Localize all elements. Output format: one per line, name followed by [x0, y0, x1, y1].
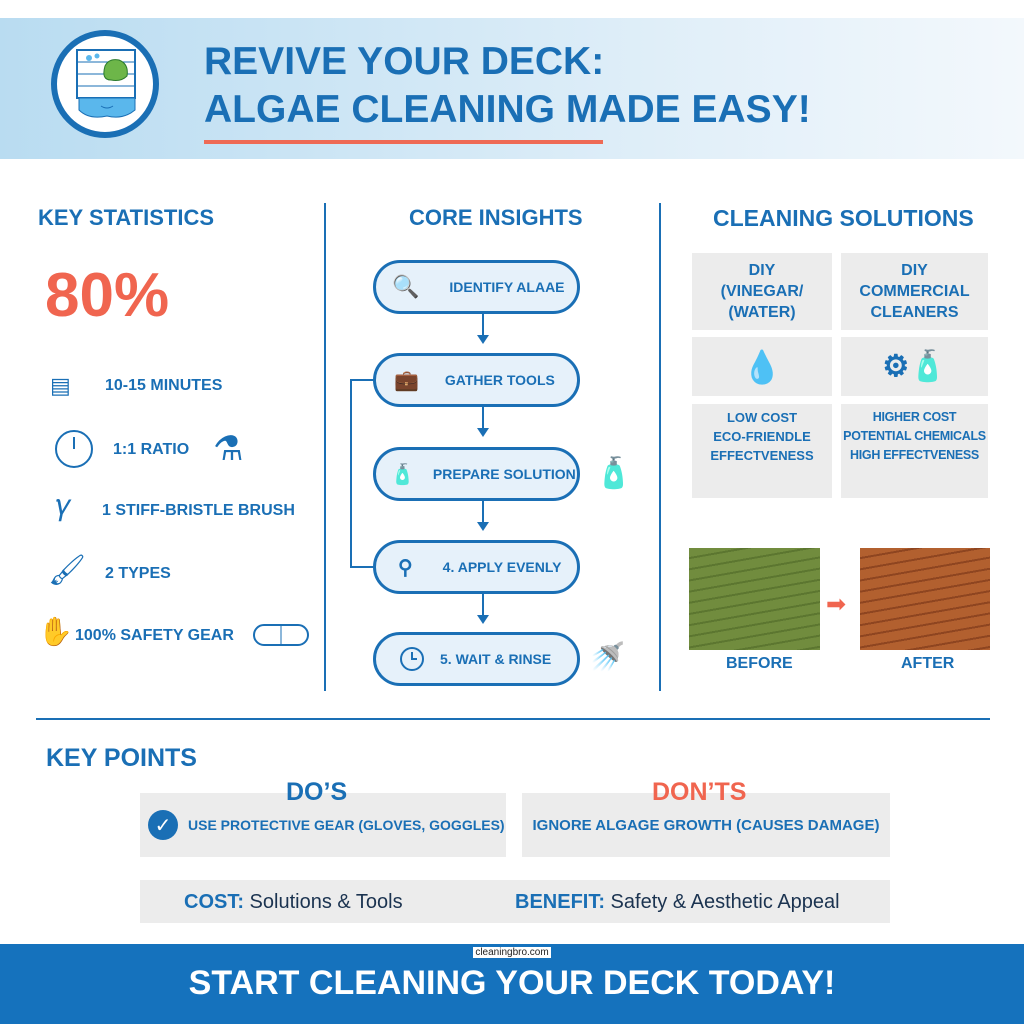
flow step 4: ⚲	[398, 556, 413, 578]
flow step 3: 🧴	[390, 464, 415, 486]
stat rows: 1 STIFF-BRISTLE BRUSH	[102, 502, 295, 519]
stat rows: ⚗	[213, 430, 243, 468]
text: HIGH EFFECTVENESS	[850, 448, 979, 462]
panel: key statistics	[38, 205, 309, 647]
do's: ✓	[155, 814, 171, 836]
flow step 5: 5. WAIT & RINSE	[440, 651, 551, 667]
solution grid: DIY	[749, 262, 775, 279]
flow step 3: PREPARE SOLUTION	[433, 466, 576, 482]
cost/benefit bar	[140, 880, 890, 923]
title: REVIVE YOUR DECK:	[204, 40, 604, 83]
stat rows: ✋	[38, 616, 73, 647]
text: COMMERCIAL	[859, 283, 970, 300]
don'ts: DON’TS	[652, 778, 746, 806]
solution grid: (WATER)	[728, 304, 796, 321]
text: 🚿	[590, 641, 625, 672]
text: AFTER	[901, 655, 954, 672]
title: ALGAE CLEANING MADE EASY!	[204, 88, 811, 131]
text: EFFECTVENESS	[710, 448, 814, 463]
text: DIY	[901, 262, 928, 279]
text: 🧴	[595, 457, 632, 490]
do's	[140, 778, 506, 857]
text: BEFORE	[726, 655, 793, 672]
flow step 1: 🔍	[392, 274, 419, 299]
before photo	[689, 548, 820, 650]
do's: USE PROTECTIVE GEAR (GLOVES, GOGGLES)	[188, 817, 505, 833]
heading: CLEANING SOLUTIONS	[713, 205, 974, 231]
text: CLEANERS	[870, 304, 958, 321]
cost/benefit bar: COST: Solutions & Tools	[184, 891, 403, 913]
solution grid	[692, 253, 832, 330]
stat rows	[38, 373, 309, 647]
flow step 2: 💼	[394, 370, 419, 392]
big stat: 80%	[45, 261, 169, 330]
don'ts	[522, 778, 890, 857]
cost/benefit bar: BENEFIT: Safety & Aesthetic Appeal	[515, 891, 840, 913]
flow step 1: IDENTIFY ALAAE	[449, 279, 565, 295]
text: HIGHER COST	[873, 410, 956, 424]
footer: cleaningbro.com	[475, 947, 549, 958]
flow step 1	[373, 260, 580, 314]
flow step 2	[373, 353, 580, 407]
do's: DO’S	[286, 778, 347, 806]
title	[204, 40, 811, 131]
dividers	[324, 203, 326, 691]
text: POTENTIAL CHEMICALS	[843, 429, 986, 443]
text: ECO-FRIENDLE	[713, 429, 811, 444]
solution grid: (VINEGAR/	[721, 283, 803, 300]
text: ⚙🧴	[882, 350, 947, 383]
flow step 4: 4. APPLY EVENLY	[443, 559, 561, 575]
heading: CORE INSIGHTS	[409, 205, 583, 230]
heading: KEY STATISTICS	[38, 205, 214, 230]
don'ts: IGNORE ALGAGE GROWTH (CAUSES DAMAGE)	[533, 816, 879, 834]
stat rows: 1:1 RATIO	[113, 441, 189, 458]
stat rows: 2 TYPES	[105, 565, 171, 582]
after photo	[860, 548, 990, 650]
stat rows: ▤	[50, 373, 71, 398]
stat rows: 🖌	[48, 554, 86, 587]
text: 💧	[742, 348, 782, 384]
flow step 2: GATHER TOOLS	[445, 372, 555, 388]
flow step 5	[373, 632, 580, 686]
footer	[0, 944, 1024, 1024]
footer: START CLEANING YOUR DECK TODAY!	[189, 964, 835, 1002]
stat rows: 𝛾	[56, 489, 72, 522]
header band	[0, 18, 1024, 159]
key points heading: KEY POINTS	[46, 744, 197, 772]
logo icon	[51, 30, 159, 138]
arrow: ➡	[826, 591, 846, 618]
text: LOW COST	[727, 410, 797, 425]
stat rows: 10-15 MINUTES	[105, 377, 222, 394]
flow step 4	[373, 540, 580, 594]
stat rows: 100% SAFETY GEAR	[75, 627, 234, 644]
flow step 3	[373, 447, 580, 501]
